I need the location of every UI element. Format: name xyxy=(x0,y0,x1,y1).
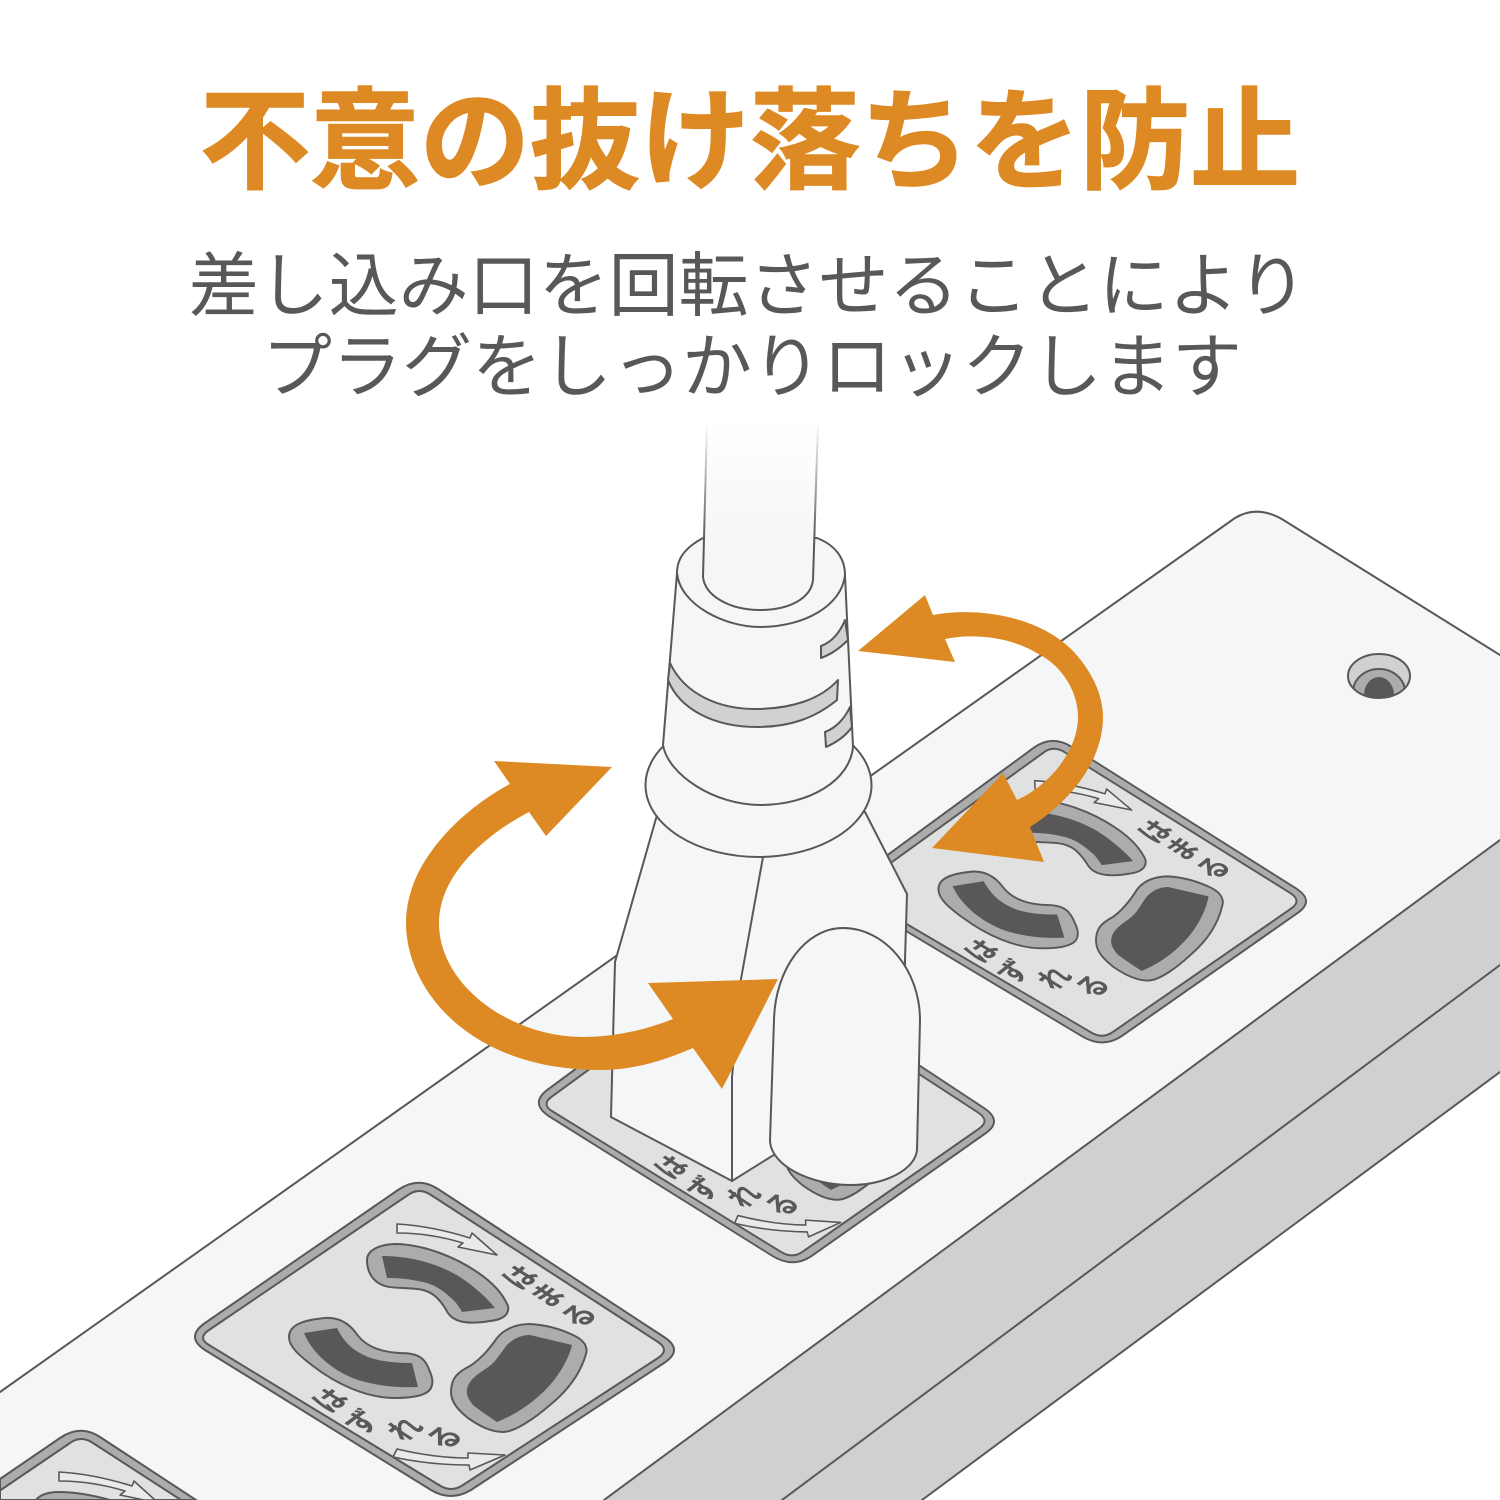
plug grip ticks xyxy=(821,620,848,658)
socket: centre under plug xyxy=(529,952,1004,1264)
icon: screw hole xyxy=(1347,653,1411,699)
socket: upper-right xyxy=(840,740,1315,1044)
socket: lower-left with slots and labels xyxy=(195,1183,674,1496)
socket label: hazureru: はずれる xyxy=(305,1364,472,1475)
strip top face xyxy=(0,512,1500,1500)
small arrow lower xyxy=(393,1449,505,1470)
plug prong cap xyxy=(770,928,920,1185)
plug grip band xyxy=(668,663,838,727)
socket label: hazureru right: はずれる xyxy=(956,915,1118,1022)
strip side face xyxy=(604,840,1500,1500)
subtitle text block: プラグをしっかりロックします xyxy=(262,328,1242,406)
cable xyxy=(703,422,818,610)
arrow: left rotation xyxy=(406,761,778,1089)
subtitle text block: 差し込み口を回転させることにより xyxy=(189,247,1307,325)
plug flange xyxy=(646,713,872,857)
title: 不意の抜け落ちを防止 xyxy=(200,81,1300,204)
subtitle text block xyxy=(189,247,1307,406)
arrow: right rotation xyxy=(858,595,1103,862)
socket label: hamaru right: はまる xyxy=(1130,815,1239,885)
socket: bottom-left partial xyxy=(0,1431,196,1500)
power strip body xyxy=(0,512,1500,1500)
plug illustration xyxy=(611,422,920,1185)
plug collar body xyxy=(663,538,853,805)
plug lower body xyxy=(611,812,907,1181)
small arrow bottom-left socket xyxy=(59,1472,155,1500)
socket label: hazureru centre: はずれる xyxy=(647,1132,808,1242)
small arrow upper xyxy=(397,1224,497,1255)
small arrow centre socket xyxy=(734,1216,842,1237)
plug collar top rim xyxy=(677,573,845,627)
small arrow right socket xyxy=(1035,780,1132,811)
socket label: hamaru: はまる xyxy=(495,1260,606,1334)
